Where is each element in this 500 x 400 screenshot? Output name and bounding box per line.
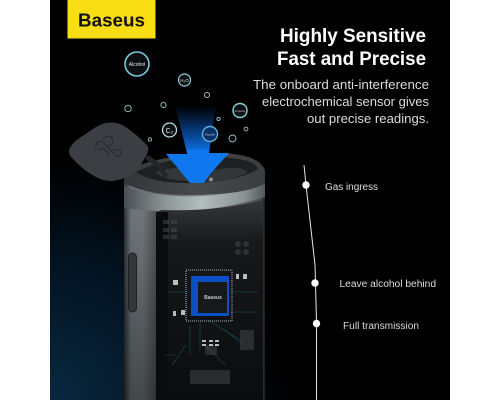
heading: Highly Sensitive: [280, 25, 426, 47]
small bubbles: [125, 92, 248, 142]
top cap: [124, 153, 265, 195]
device body: [124, 178, 265, 400]
heading: [277, 25, 426, 70]
description text: The onboard anti-interference: [253, 78, 429, 92]
chip: Baseus: [204, 295, 222, 301]
logo: [68, 0, 156, 38]
description text: [253, 78, 429, 126]
blue arrow: [166, 105, 229, 183]
background panel: [50, 0, 450, 400]
bubble: H2O: H₂O: [180, 78, 189, 83]
point: full transmission: Full transmission: [343, 321, 419, 332]
timeline: [302, 165, 436, 400]
lid logo: [96, 136, 121, 157]
point: leave alcohol behind: Leave alcohol behind: [340, 279, 436, 290]
circuit board: [163, 220, 258, 384]
description text: electrochemical sensor gives: [262, 95, 429, 109]
chip: [186, 270, 232, 321]
tether: [146, 157, 166, 177]
bubble: alcohol small: [202, 126, 218, 142]
bubble: CO2: C₂: [166, 128, 174, 135]
gas bubbles: [125, 52, 248, 142]
lid: [69, 123, 166, 181]
lid cap: [69, 123, 148, 181]
bubble: alcohol small: Alcohol: [205, 132, 215, 136]
sensor window: [156, 200, 263, 400]
logo: Baseus: [78, 10, 145, 30]
heading: Fast and Precise: [277, 48, 426, 70]
bubble: alcohol: Alcohol: [129, 62, 145, 68]
point: gas ingress: Gas ingress: [325, 182, 378, 193]
point: full transmission: [313, 320, 419, 332]
description text: out precise readings.: [307, 112, 429, 126]
side button: [128, 253, 136, 312]
light band: [124, 184, 265, 211]
device: [124, 153, 265, 400]
bubble: impurity: Impurity: [235, 109, 246, 113]
point: gas ingress: [302, 181, 378, 193]
